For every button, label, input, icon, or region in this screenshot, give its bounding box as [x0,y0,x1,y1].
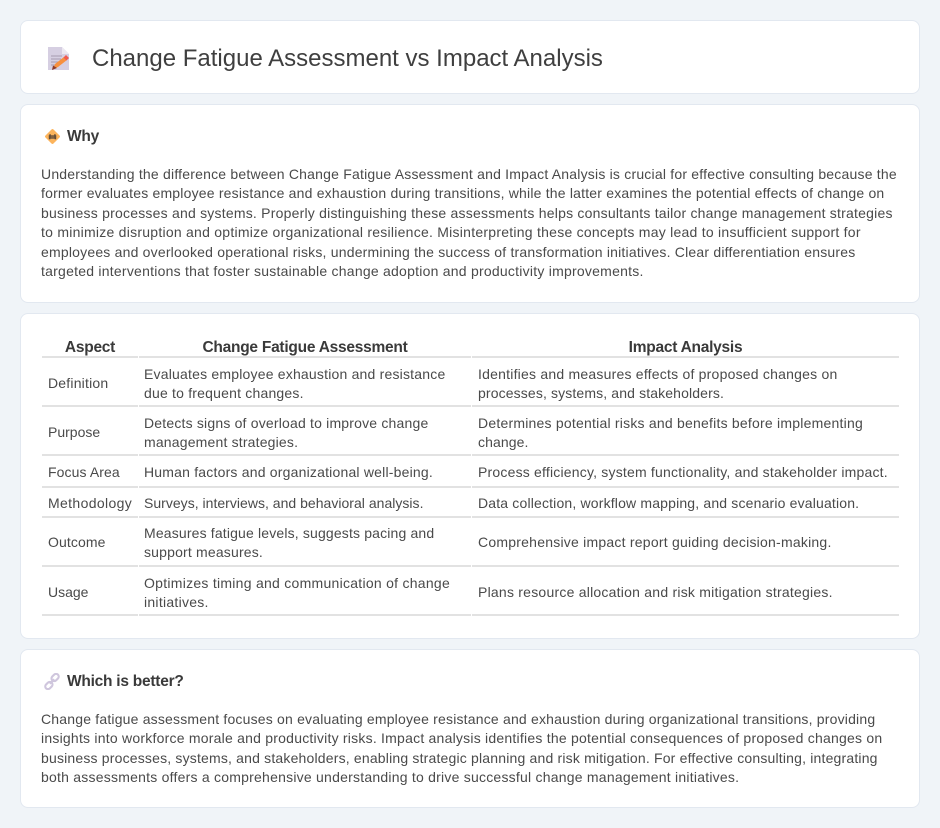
table header row: Impact Analysis [629,339,742,356]
row: purpose: change. [478,434,529,450]
text block: why explanation: employees and overlooked operational risks, undermining the success of transformation initiatives. Clear differentiation ensures [41,244,855,260]
heading: which is better: Which is better? [67,673,184,690]
row: definition: Evaluates employee exhaustion and resistance [144,366,445,382]
row: definition: Definition [48,375,108,391]
panel: which is better [20,649,920,808]
row: usage: initiatives. [144,594,209,610]
text block: why explanation: business processes and systems. Properly distinguishing these assessments helps consultants tailor change management strategies [41,205,893,221]
row: focus area: Focus Area [48,464,120,480]
title: Change Fatigue Assessment vs Impact Analysis [92,45,603,72]
text block: why explanation: former evaluates employee resistance and exhaustion during transitions, while the latter examines the potential effects of change on [41,185,884,201]
icon: document with pencil [48,47,69,70]
row: outcome: support measures. [144,544,263,560]
row: methodology: Surveys, interviews, and behavioral analysis. [144,495,423,511]
row: usage [48,575,833,610]
row: methodology: Methodology [48,495,132,511]
icon: chain link [44,673,60,690]
text block: why explanation: targeted interventions that foster sustainable change adoption and productivity improvements. [41,263,644,279]
row: methodology: Data collection, workflow mapping, and scenario evaluation. [478,495,859,511]
row: definition [48,366,838,401]
table header row: Change Fatigue Assessment [202,339,408,356]
heading: why: Why [67,128,99,145]
row: definition: due to frequent changes. [144,385,304,401]
icon: warning diamond [45,129,60,144]
row: definition: Identifies and measures effects of proposed changes on [478,366,838,382]
text block: why explanation: to minimize disruption and optimize organizational resilience. Misinterpreting these concepts may lead to insufficient support for [41,224,861,240]
panel: comparison table [20,313,920,639]
panel: title header [20,20,920,94]
row: purpose: Determines potential risks and benefits before implementing [478,415,863,431]
row: usage: Plans resource allocation and risk mitigation strategies. [478,584,833,600]
text block: which is better explanation: both assessments offers a comprehensive understanding to drive successful change management initiatives. [41,769,739,785]
row: purpose: Purpose [48,424,100,440]
table header row: Aspect [65,339,115,356]
text block: why explanation [41,166,897,279]
row: purpose [48,415,863,450]
text block: why explanation: Understanding the difference between Change Fatigue Assessment and Impact Analysis is crucial for effective consulting because the [41,166,897,182]
row: usage: Usage [48,584,88,600]
text block: which is better explanation: Change fatigue assessment focuses on evaluating employee resistance and exhaustion during organizational transitions, providing [41,711,875,727]
row: methodology [48,495,859,511]
row: focus area [48,464,888,480]
row: purpose: management strategies. [144,434,298,450]
row: outcome: Measures fatigue levels, suggests pacing and [144,525,434,541]
table header row [65,339,742,356]
text block: which is better explanation: insights into workforce morale and productivity risks. Impact analysis identifies the potential consequences of proposed changes on [41,730,882,746]
text block: which is better explanation: business processes, systems, and stakeholders, enabling strategic planning and risk mitigation. For effective consulting, integrating [41,750,878,766]
row: focus area: Human factors and organizational well-being. [144,464,433,480]
panel: why [20,104,920,303]
row: outcome: Outcome [48,534,106,550]
row: definition: processes, systems, and stakeholders. [478,385,724,401]
row: outcome: Comprehensive impact report guiding decision-making. [478,534,832,550]
row: focus area: Process efficiency, system functionality, and stakeholder impact. [478,464,888,480]
row: purpose: Detects signs of overload to improve change [144,415,428,431]
row: outcome [48,525,832,560]
row: usage: Optimizes timing and communication of change [144,575,450,591]
text block: which is better explanation [41,711,882,785]
